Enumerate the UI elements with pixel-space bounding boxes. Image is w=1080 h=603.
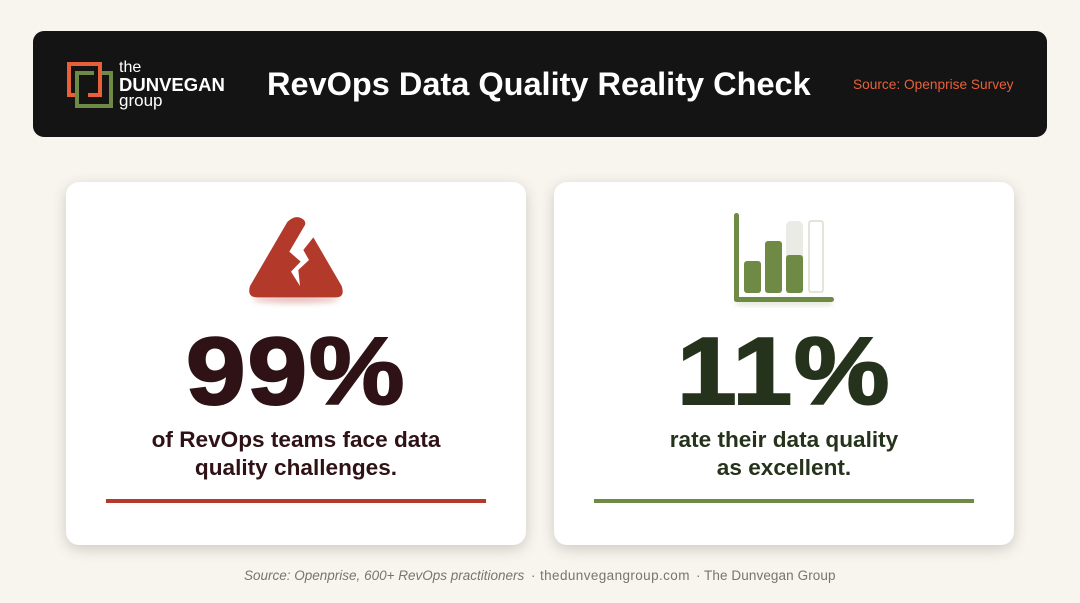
accent rule: [594, 499, 974, 503]
big stat: 99%: [186, 318, 406, 425]
footer: thedunvegangroup.com: [540, 568, 690, 583]
footer: [244, 568, 836, 583]
caption: of RevOps teams face data: [152, 427, 440, 452]
logo wordmark: group: [119, 91, 162, 110]
footer: Source: Openprise, 600+ RevOps practitioners: [244, 568, 524, 583]
logo: [67, 59, 225, 110]
title: RevOps Data Quality Reality Check: [267, 66, 811, 102]
caption: as excellent.: [717, 455, 851, 480]
icon: cracked warning triangle: [249, 217, 343, 306]
logo wordmark: [119, 59, 225, 110]
logo wordmark: the: [119, 59, 141, 76]
header banner: [33, 31, 1047, 137]
caption: quality challenges.: [195, 455, 397, 480]
caption: [152, 427, 441, 480]
panel: 99% challenges: [66, 182, 526, 545]
source note: Source: Openprise Survey: [853, 77, 1014, 92]
accent rule: [106, 499, 486, 503]
caption: [670, 427, 898, 480]
panel: 11% excellent: [554, 182, 1014, 545]
footer: ·: [531, 568, 536, 583]
logo icon: overlapping squares: [67, 62, 113, 108]
big stat: 11%: [677, 318, 891, 425]
logo wordmark: DUNVEGAN: [119, 74, 225, 95]
icon: bar chart: [734, 213, 834, 308]
caption: rate their data quality: [670, 427, 898, 452]
footer: The Dunvegan Group: [704, 568, 836, 583]
footer: ·: [696, 568, 700, 583]
